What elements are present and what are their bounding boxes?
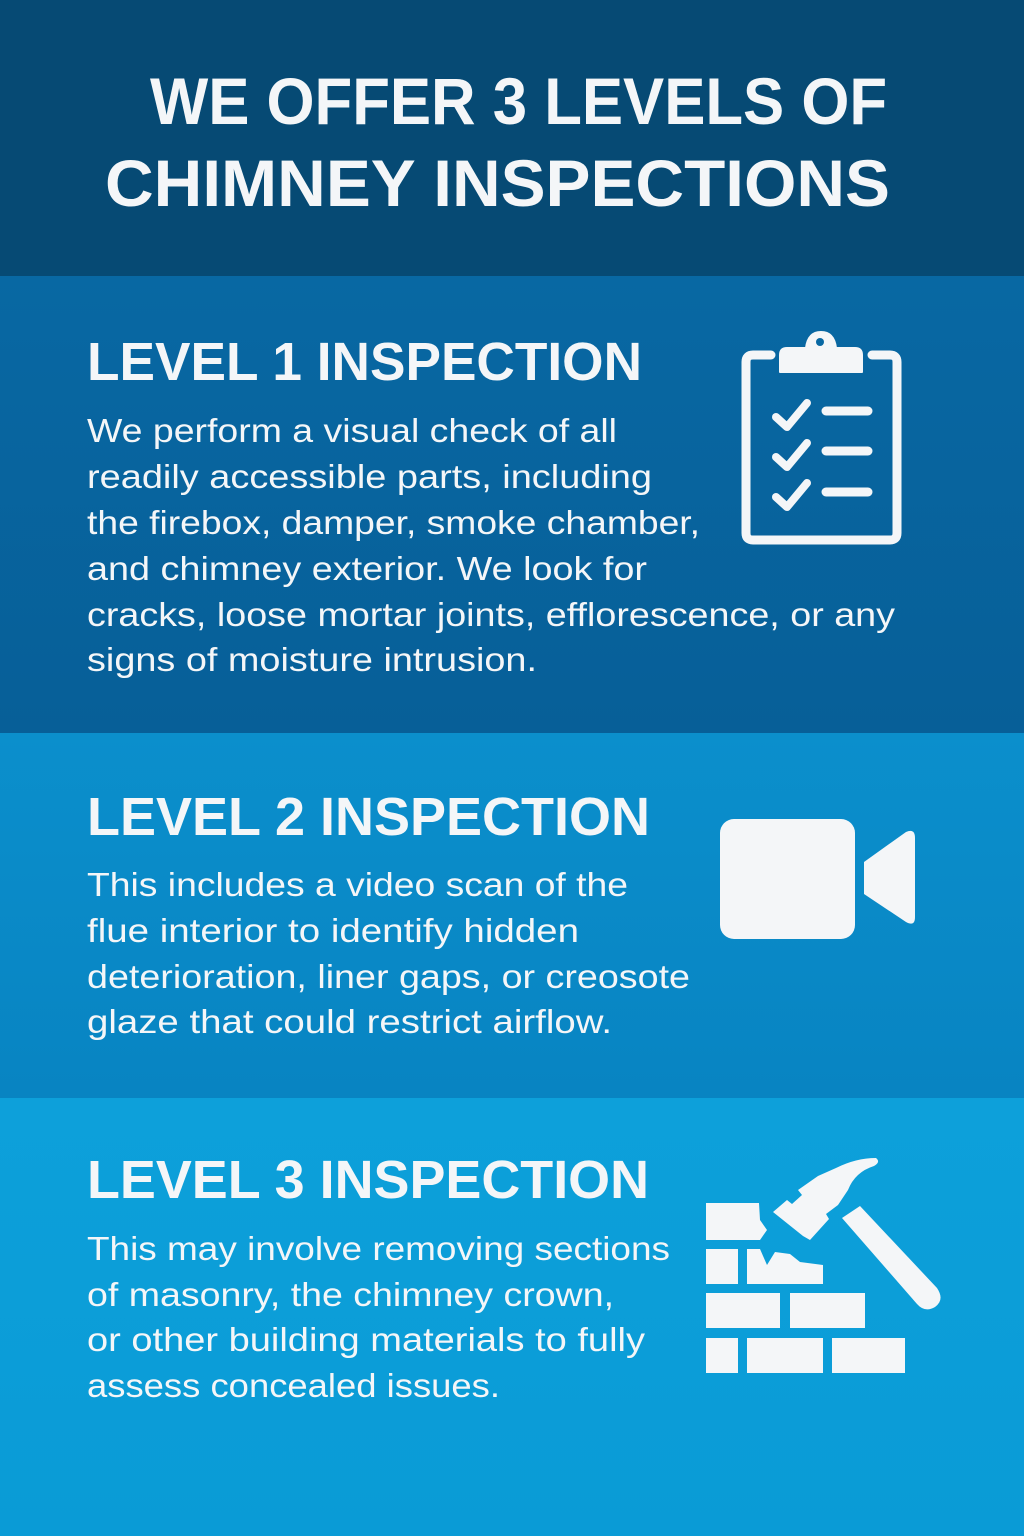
heading: level 1: LEVEL 1 INSPECTION xyxy=(87,332,642,392)
text block: level 1 description: signs of moisture intrusion. xyxy=(87,641,537,678)
text block: level 3 description: assess concealed issues. xyxy=(87,1367,500,1404)
title: CHIMNEY INSPECTIONS xyxy=(105,146,890,220)
text block: level 2 description: This includes a video scan of the xyxy=(87,866,628,903)
text block: level 1 description xyxy=(87,412,896,678)
title: WE OFFER 3 LEVELS OF xyxy=(150,64,887,138)
text block: level 1 description: and chimney exterior. We look for xyxy=(87,550,647,587)
text block: level 3 description: of masonry, the chimney crown, xyxy=(87,1276,614,1313)
icon: video camera xyxy=(720,819,915,939)
title xyxy=(105,64,890,220)
text block: level 1 description: cracks, loose mortar joints, efflorescence, or any xyxy=(87,596,896,633)
heading: level 2: LEVEL 2 INSPECTION xyxy=(87,787,650,847)
icon: clipboard checklist xyxy=(746,332,897,540)
heading: level 3: LEVEL 3 INSPECTION xyxy=(87,1150,649,1210)
panel: header xyxy=(0,0,1024,276)
text block: level 1 description: the firebox, damper, smoke chamber, xyxy=(87,504,700,541)
text block: level 1 description: readily accessible parts, including xyxy=(87,458,652,495)
icon: brick wall with hammer xyxy=(706,1158,941,1373)
panel: level 2 xyxy=(0,733,1024,1098)
text block: level 2 description: glaze that could restrict airflow. xyxy=(87,1003,612,1040)
text block: level 2 description: flue interior to identify hidden xyxy=(87,912,579,949)
text block: level 3 description: This may involve removing sections xyxy=(87,1230,670,1267)
text block: level 3 description: or other building materials to fully xyxy=(87,1321,646,1358)
panel: level 3 xyxy=(0,1098,1024,1536)
text block: level 2 description xyxy=(87,866,690,1040)
text block: level 3 description xyxy=(87,1230,670,1404)
text block: level 1 description: We perform a visual check of all xyxy=(87,412,617,449)
text block: level 2 description: deterioration, liner gaps, or creosote xyxy=(87,958,690,995)
panel: level 1 xyxy=(0,276,1024,733)
